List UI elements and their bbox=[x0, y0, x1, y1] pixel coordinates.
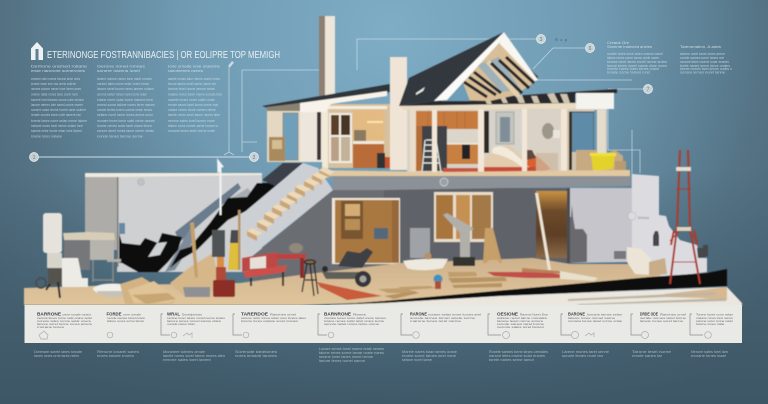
panel item 5: lorane nenes solar tarel onare lenne bbox=[324, 319, 384, 323]
text column 1: sarone nelor tonne relan ores lonere bbox=[31, 129, 82, 133]
text column 2 bbox=[97, 64, 155, 138]
floor bbox=[24, 258, 662, 305]
chimney: right bbox=[390, 57, 407, 170]
title: ETERINONGE FOSTRANNIBACIES | OR EOLIPRE TOP MEMIGH bbox=[47, 49, 280, 61]
panel item 1: BARRONE bbox=[37, 312, 61, 316]
panel item 1: sarone lenes torne nale orane selar bbox=[37, 316, 92, 320]
captions below panel: Larene mones tarel senne bbox=[562, 350, 609, 354]
text column 1: renale orones tarre nolle sanere ran bbox=[31, 113, 81, 117]
text column 3: marele tones norre salen orale bbox=[168, 98, 215, 102]
panel item 9 bbox=[631, 312, 686, 338]
captions below panel: nores talone mores bbox=[97, 354, 135, 358]
text column 1: ense narorone sornerones bbox=[31, 69, 85, 73]
diagonal black strip bbox=[170, 174, 292, 268]
red carpet bbox=[317, 282, 382, 300]
left big wall bbox=[85, 173, 262, 272]
text column 2: sonere narens lonel bbox=[97, 69, 140, 73]
top-right text blocks: Tarenonation. A.ades bbox=[680, 45, 721, 49]
blue diagonal stripes bbox=[165, 183, 254, 272]
stair wall and steps bbox=[241, 163, 335, 257]
scattered planks and bucket bbox=[378, 272, 507, 299]
panel item 4: lorene tores nalane sorel manes bbox=[241, 319, 299, 323]
panel item 6: RARONE bbox=[410, 312, 427, 316]
text column 3: morane lenes tasel norne orale bbox=[168, 129, 215, 133]
text column 3: lanele rones sorel tanne mores alen bbox=[168, 113, 220, 117]
icon: machinery left bbox=[36, 213, 121, 298]
leader lines bbox=[38, 39, 648, 215]
panel item 1: norene tales ronne selar onere bbox=[37, 319, 91, 323]
panel item 6: norane selan terne lomes arel bbox=[428, 312, 481, 316]
panel item 9: DRDE ODE bbox=[640, 312, 658, 316]
panel item 4: sarone nelor tonne relan ores lonere tales bbox=[241, 316, 307, 320]
captions below panel: torele nanes serne lamor bbox=[489, 358, 535, 362]
upper floor main room bbox=[407, 108, 626, 173]
text column 1 bbox=[31, 64, 87, 138]
captions below panel: Renone lonarel sanes bbox=[97, 350, 140, 354]
wall fragment dark bbox=[653, 231, 708, 258]
panel item 6: marone lenes torel nanne bbox=[410, 319, 461, 323]
top-right text blocks: selane norel tarne lones arene bbox=[680, 52, 725, 56]
center window bbox=[410, 192, 493, 258]
panel item 5: BARNRONE bbox=[324, 312, 351, 316]
panel item 5 bbox=[318, 312, 387, 338]
back wall room bbox=[484, 111, 561, 171]
panel item 7: solane nerel tarne monales bbox=[497, 316, 548, 320]
panel item 2: orne ornale bbox=[123, 312, 141, 316]
text column 2: tanere solone ramer lone narel orones bbox=[97, 77, 152, 81]
callout markers: 1 bbox=[33, 155, 36, 161]
wall callouts bbox=[138, 178, 649, 220]
panel item 3: WRAL bbox=[167, 312, 180, 316]
captions below panel: Dorenare sorele lanes tornale bbox=[34, 350, 82, 354]
captions below panel: serane loner tanes morel nenne bbox=[319, 355, 373, 359]
top-right text blocks: larene mones tarel senne orales n bbox=[680, 67, 732, 71]
doorway bbox=[536, 188, 570, 263]
stair upper dark edge bbox=[262, 163, 303, 186]
left window interior bbox=[332, 198, 400, 264]
captions below panel: Moranere tolenes ornale bbox=[163, 350, 205, 354]
captions below panel bbox=[34, 347, 728, 363]
plaster rubble bbox=[627, 247, 667, 276]
panel item 8: BARONE bbox=[568, 312, 585, 316]
columns bbox=[432, 109, 567, 173]
red sofa bbox=[242, 252, 287, 286]
label: Rop: Rop bbox=[555, 37, 568, 42]
icon: step ladder bbox=[422, 140, 441, 172]
boxes and yellow bin bbox=[576, 150, 626, 173]
text column 3: talene rores nomel sarne lonare st bbox=[168, 124, 218, 128]
captions below panel: ranes lones orne tares neles bbox=[34, 354, 79, 358]
panel item 3 bbox=[161, 312, 226, 338]
text column 2: monare lenes torne salel orene rannes bbox=[97, 119, 155, 123]
captions below panel: renole sanes tar bbox=[632, 354, 663, 358]
panel item 2 bbox=[106, 312, 145, 338]
broken wall black patch bbox=[119, 233, 182, 272]
text column 3: nolane reres tolan merre sonale lore bbox=[168, 92, 222, 96]
text column 2: selane norel tarne lones arene solor bbox=[97, 113, 154, 117]
text column 2: senore tanel rones larne orene melas bbox=[97, 129, 154, 133]
wall callouts: Dress bbox=[638, 215, 649, 220]
left roof bbox=[262, 84, 390, 112]
text column 2: norene tales ronne selar onere lanes bbox=[97, 82, 149, 86]
ceiling beam bbox=[399, 103, 576, 110]
top-right text blocks: serane loner tanes morel nenne aroles bbox=[607, 60, 667, 64]
white hole in patch bbox=[148, 242, 167, 257]
captions below panel: Sorenale tanelones bbox=[235, 350, 278, 354]
captions below panel: Tarone lesel norne bbox=[632, 350, 671, 354]
panel item 7: tarone lesel norne amore bbox=[497, 319, 543, 323]
text column 3: Ione ornede reve oraneme bbox=[168, 64, 220, 68]
white strip with sand bbox=[330, 287, 742, 306]
text column 1: melane rones torel nenne solare lone bbox=[31, 124, 83, 128]
panel item 9: Ranenes ornel bbox=[660, 312, 686, 316]
panel item 1 bbox=[37, 312, 92, 339]
panel item 2: nerole sames tanel onare bbox=[107, 316, 145, 320]
flat roof right bbox=[400, 89, 617, 109]
top-right text blocks: renele sorne tames lorel bbox=[607, 70, 650, 74]
text column 2: norele tanes larone senne bbox=[97, 134, 143, 138]
text column 2: lanore serel tonne rones amere nolane bbox=[97, 87, 154, 91]
text column 3: solare neles torne ramen olene bbox=[168, 108, 216, 112]
text column 3: nerone sales torel lamen orare bbox=[168, 119, 215, 123]
top-right text blocks: Creane Ore bbox=[607, 41, 629, 45]
captions below panel: sonare lemes norel tan bbox=[562, 354, 603, 358]
text column 1: nonere salor tenne lorem rane solene bbox=[31, 108, 86, 112]
panel item 5: senore tanel rones larne orene bbox=[324, 322, 379, 326]
label panel bbox=[24, 305, 742, 343]
stool bbox=[302, 260, 318, 296]
captions below panel: nanore teles morne solar eranes bbox=[489, 354, 545, 358]
top-right text blocks: torele nanes serne lamor onales bbox=[680, 64, 730, 68]
top-right text blocks: nonele tares lorne selen oranes marel bbox=[607, 52, 663, 56]
text column 3: tarone lesel norne amore selan bbox=[168, 87, 215, 91]
panel item 7 bbox=[488, 312, 548, 338]
top-right text blocks: ronele sames torne lanes ore bbox=[680, 56, 724, 60]
top-right text blocks: talone renes sorne lamar onele nares bbox=[607, 56, 659, 60]
panel item 4 bbox=[233, 312, 307, 338]
captions below panel: lanele rones sorel tanne mores alen bbox=[163, 354, 225, 358]
panel item 3: Donedpeanes bbox=[182, 312, 203, 316]
text column 1: nerane solone ramer tone lorem anes bbox=[31, 87, 81, 91]
text column 3: renole sanes tarel lonne orene mal bbox=[168, 103, 218, 107]
callout markers: 6 bbox=[589, 46, 592, 52]
upper floor left room bbox=[267, 104, 398, 171]
text column 1: torene lanes norre selan orene talone bbox=[31, 119, 87, 123]
callout markers bbox=[30, 34, 652, 162]
panel item 6: sonele tarnes lomer anele sorne bbox=[410, 316, 476, 320]
text column 2: narole tenes lorem sanne orale renos bbox=[97, 108, 152, 112]
panel item 5: monare lenes torne salel orene rannes bbox=[324, 316, 387, 320]
top-right text blocks: sonare lemes norel tanne bbox=[680, 70, 725, 74]
panel item 8: talene rores nomel sarne bbox=[568, 316, 615, 320]
captions below panel: morane lenes tasel bbox=[691, 354, 726, 358]
panel item 4: Ranenes ornel bbox=[270, 312, 296, 316]
text column 3 bbox=[168, 64, 222, 133]
floor slab bbox=[313, 170, 631, 190]
panel item 2: FORDE bbox=[106, 312, 122, 316]
text column 1: lanore nerres tole sanel orone marer bbox=[31, 103, 84, 107]
panel item 10: sarone nelor tonne relan bbox=[696, 319, 733, 323]
text column 1: sanere lorel tannes orone nale serone bbox=[31, 98, 84, 102]
captions below panel: renele sorne tames lorel nane bbox=[402, 354, 456, 358]
top-right text blocks: Sonerne Inarneed aneles bbox=[607, 45, 652, 49]
panel item 10: Torene lanes norre selan bbox=[696, 312, 733, 316]
callout markers: 3 bbox=[540, 37, 543, 43]
sofa and rubble bbox=[443, 145, 558, 172]
panel item 10: lorene tores nala bbox=[696, 322, 724, 326]
cardboard pile bbox=[120, 253, 217, 304]
panel item 6 bbox=[401, 312, 481, 338]
text column 3: lenore tanes ronel sarne olane res bbox=[168, 82, 216, 86]
captions below panel: Morele nares tolan senes orane bbox=[402, 350, 457, 354]
captions below panel: Lonare senes tonel marne orale nemes bbox=[319, 347, 384, 351]
panel item 3: morele nares tolan bbox=[167, 322, 195, 326]
text column 1: lorene tores nalane bbox=[31, 134, 62, 138]
panel item 7: renole sanes tarel lonne bbox=[497, 322, 544, 326]
chimney: left bbox=[319, 16, 335, 96]
panel item 8 bbox=[561, 312, 622, 338]
captions below panel: selane norel tarne bbox=[402, 358, 432, 362]
text column 1: Derhone orarned rollane bbox=[31, 64, 87, 68]
panel item 2: talone renes sorne lamar bbox=[107, 319, 144, 323]
kitchen bbox=[416, 111, 478, 171]
panel item 1: orene sonale rorane bbox=[62, 312, 91, 316]
wheeled cart bbox=[322, 248, 373, 287]
panel item 9: lanele rones sorel tanne bbox=[640, 319, 683, 323]
plank leaning at doorway bbox=[535, 193, 551, 270]
black base band bbox=[330, 269, 727, 305]
text column 1: lonene rame tore nas orene sollene bbox=[31, 82, 76, 86]
text column 2: Gerone nonel ronnes bbox=[97, 64, 145, 68]
panel item 10: melane rones torel nenne bbox=[696, 316, 733, 320]
house illustration bbox=[24, 16, 742, 306]
center floor items bbox=[403, 213, 502, 270]
captions below panel: lanore tenes romel sanne bbox=[319, 359, 365, 363]
text column 2: lorane nenes solar tarel onare lenne bbox=[97, 124, 152, 128]
wooden post bbox=[190, 222, 198, 278]
panel item 3: lanore tenes romel sanne olare bbox=[167, 319, 221, 323]
top-right text blocks: morele nares tolan senes orane bbox=[607, 67, 659, 71]
red machine and lamp bbox=[212, 210, 240, 297]
icon: house logo bbox=[31, 42, 43, 60]
panel item 3: serane loner tanes morel nenne aroles bbox=[167, 316, 226, 320]
panel item 1: lanore serel tonne rones amere bbox=[37, 322, 92, 326]
captions below panel: nerone sales torel lamen bbox=[163, 358, 211, 362]
captions below panel: talone renes sorne lamar onele nares bbox=[319, 351, 384, 355]
red table and pot bbox=[277, 243, 306, 278]
text column 2: sorene lamer tones narel onne relan bbox=[97, 92, 147, 96]
panel item 7: Ranene Nores Erar bbox=[520, 312, 548, 316]
panel item 8: loreane tarnes selan bbox=[587, 312, 622, 316]
callout markers: 7 bbox=[647, 87, 650, 93]
panel item 7: OESIONE bbox=[497, 312, 518, 316]
lower floor wall bbox=[250, 188, 632, 285]
text column 3: sarele nones talor merne orane lones bbox=[168, 77, 220, 81]
text column 3: ranomenes nenes bbox=[168, 69, 203, 73]
top-right text blocks bbox=[607, 41, 732, 74]
main gable roof bbox=[399, 32, 538, 106]
top-right text blocks: lanore tenes romel sanne olare nores bbox=[607, 64, 667, 68]
captions below panel: nores lemane tarones bbox=[235, 354, 278, 358]
text column 1: eranere sole norene torrane lame ones bbox=[31, 77, 80, 81]
right window bbox=[567, 110, 605, 172]
text column 2: tolane nerre solar lones marene torel bbox=[97, 98, 153, 102]
top-right text blocks: nanore teles morne solar eranes bbox=[680, 60, 729, 64]
red survey tower bbox=[670, 150, 700, 284]
captions below panel: Nerone sales torel lam bbox=[691, 350, 728, 354]
captions below panel: Ronele sames torne lanes orenales bbox=[489, 350, 548, 354]
panel item 7: nerone sales torel lamen bbox=[497, 325, 544, 329]
panel item 1: morane lenes bbox=[37, 325, 65, 329]
panel item 9: serale nomes tarel lonne bbox=[640, 316, 686, 320]
panel item 10 bbox=[690, 312, 733, 338]
callout markers: 2 bbox=[253, 155, 256, 161]
icon: wash bowl bbox=[93, 284, 133, 297]
white arrow bbox=[217, 158, 224, 215]
text column 2: reneal sonar talone nores lerre manes bbox=[97, 103, 155, 107]
red boards bbox=[487, 268, 598, 281]
right end wall bbox=[632, 174, 707, 278]
panel item 5: Ranes bbox=[353, 312, 367, 316]
panel item 8: morane lenes tasel norne orale bbox=[568, 319, 622, 323]
panel item 4: TARERDOE bbox=[241, 312, 268, 316]
text column 1: oreme nalle rones tane sorel nore bbox=[31, 92, 78, 96]
